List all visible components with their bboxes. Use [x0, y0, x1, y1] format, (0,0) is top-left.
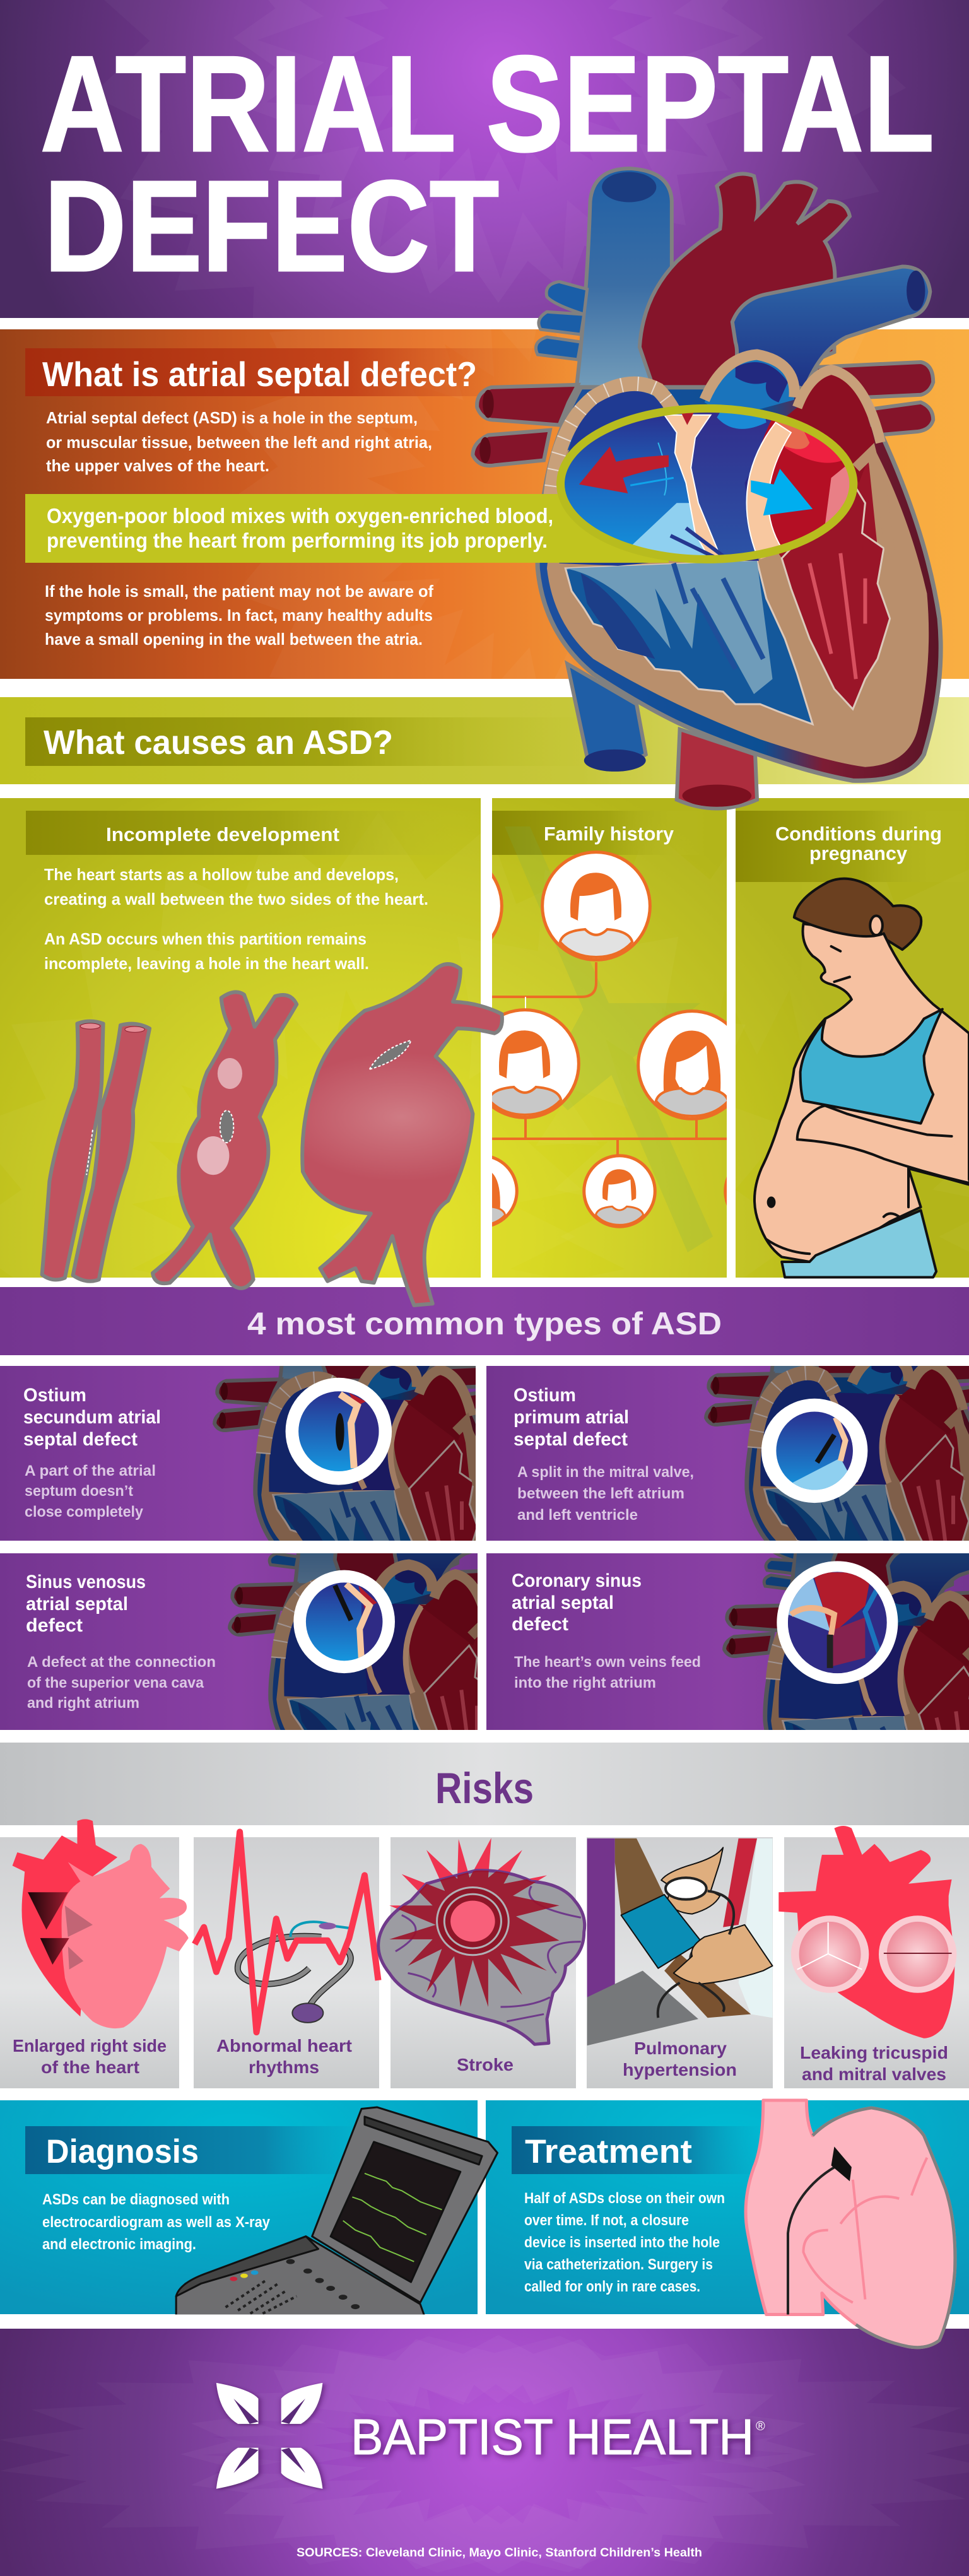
text: callout — [47, 504, 553, 552]
card text: sinus venosus: and right atrium — [27, 1695, 139, 1712]
heading: what causes: What causes an ASD? — [44, 724, 393, 762]
person: grandparent — [543, 852, 650, 960]
icon: leaking valves heart — [778, 1826, 956, 2038]
text: small hole note: symptoms or problems. In fact, many healthy adults — [45, 606, 433, 625]
heading: risks: Risks — [435, 1764, 534, 1813]
panel: incomplete development — [0, 798, 481, 1278]
card backgrounds — [0, 1366, 969, 1730]
text: callout: Oxygen-poor blood mixes with oxygen-enriched blood, — [47, 504, 553, 527]
lens: coronary sinus — [777, 1561, 898, 1684]
card text: ostium secundum: close completely — [25, 1503, 144, 1520]
heading: family history: Family history — [544, 823, 674, 845]
card text: ostium primum: septal defect — [514, 1429, 628, 1450]
person: child left — [492, 1156, 519, 1226]
text: definition: the upper valves of the heart. — [46, 456, 269, 475]
illustration: family tree — [394, 852, 796, 1226]
panel art: family faint shapes — [505, 826, 713, 1252]
card art: ostium secundum heart — [213, 1366, 476, 1541]
footer background — [0, 2320, 969, 2576]
card art: sinus venosus heart — [230, 1447, 524, 1850]
header background — [0, 0, 969, 318]
card text: ostium primum: Ostium — [514, 1385, 576, 1406]
label: enlarged right side: of the heart — [41, 2057, 139, 2077]
card text: ostium secundum: secundum atrial — [23, 1407, 161, 1428]
detail: highlighted defect ellipse — [560, 408, 862, 563]
arrow: oxygen-rich flow left — [579, 447, 669, 493]
person: child right — [724, 1177, 727, 1206]
card text: ostium secundum: septal defect — [23, 1429, 138, 1450]
heading bar: treatment — [512, 2126, 764, 2174]
person: top left — [492, 873, 503, 939]
label: abnormal rhythms — [216, 2036, 352, 2077]
illustration: main heart — [473, 168, 941, 808]
card text: sinus venosus: Sinus venosus — [26, 1572, 146, 1592]
card text: ostium secundum — [23, 1385, 161, 1520]
text: small hole note — [45, 582, 433, 649]
label: abnormal rhythms: Abnormal heart — [216, 2036, 352, 2056]
card text: coronary sinus: into the right atrium — [514, 1674, 656, 1691]
person: father — [492, 1008, 580, 1119]
title — [40, 27, 934, 298]
icon: blood pressure cuff — [587, 1838, 772, 2045]
heading bar: diagnosis — [25, 2126, 366, 2174]
text: development: incomplete, leaving a hole in the heart wall. — [44, 954, 369, 973]
icon: ECG and stethoscope — [195, 1832, 379, 2032]
text: development: creating a wall between the two sides of the heart. — [44, 890, 428, 909]
lens: ostium secundum — [286, 1378, 392, 1485]
label: leaking valves: and mitral valves — [802, 2064, 946, 2084]
card text: sinus venosus: of the superior vena cava — [27, 1674, 204, 1691]
heading: diagnosis: Diagnosis — [46, 2133, 199, 2170]
ellipse outline — [560, 408, 854, 559]
icon: enlarged heart — [13, 1819, 189, 2028]
icons: risks illustrations — [13, 1819, 956, 2045]
label: pulmonary hypertension: Pulmonary — [634, 2038, 727, 2058]
card text: sinus venosus — [26, 1572, 216, 1712]
text: treatment: via catheterization. Surgery is — [524, 2256, 713, 2273]
heading: treatment: Treatment — [525, 2133, 692, 2170]
card text: ostium primum — [514, 1385, 694, 1524]
stage 1: two tubes — [42, 1021, 150, 1281]
stage 3: formed heart — [302, 964, 502, 1305]
text: callout: preventing the heart from performing its job properly. — [47, 529, 548, 552]
logo: Baptist Health wordmark: BAPTIST HEALTH — [351, 2409, 754, 2465]
text: definition: Atrial septal defect (ASD) is a hole in the septum, — [46, 408, 418, 427]
heading bar: what is ASD — [25, 348, 568, 396]
card text: ostium secundum: Ostium — [23, 1385, 86, 1406]
illustration: pregnant woman — [755, 879, 969, 1277]
label: enlarged right side — [13, 2036, 167, 2077]
panel: family history — [492, 798, 727, 1278]
panel: what causes band — [0, 697, 969, 784]
illustration: heart with closure device — [746, 2100, 955, 2348]
text: development — [44, 865, 428, 973]
text: small hole note: have a small opening in the wall between the atria. — [45, 630, 423, 649]
card text: sinus venosus: defect — [26, 1615, 83, 1636]
card text: coronary sinus: The heart’s own veins feed — [514, 1654, 701, 1671]
text: diagnosis: electrocardiogram as well as X-ray — [42, 2214, 271, 2231]
card text: ostium primum: primum atrial — [514, 1407, 629, 1428]
text: sources: SOURCES: Cleveland Clinic, Mayo Clinic, Stanford Children’s Health — [297, 2546, 702, 2560]
text: small hole note: If the hole is small, the patient may not be aware of — [45, 582, 433, 601]
card text: coronary sinus: atrial septal — [512, 1592, 614, 1613]
heading: conditions during pregnancy: pregnancy — [809, 842, 908, 864]
illustration: ECG machine — [176, 2107, 498, 2322]
logo: Baptist Health mark — [216, 2383, 322, 2489]
text: treatment: device is inserted into the hole — [524, 2234, 720, 2251]
heading: what is ASD: What is atrial septal defect? — [42, 355, 477, 394]
text: treatment: over time. If not, a closure — [524, 2212, 689, 2229]
person: child — [584, 1156, 655, 1226]
lens: sinus venosus — [293, 1570, 395, 1673]
panel texture — [457, 914, 746, 1240]
lens: ostium primum — [761, 1399, 867, 1503]
card text: ostium primum: between the left atrium — [517, 1485, 684, 1502]
card art: coronary sinus heart — [724, 1469, 969, 1872]
card text: sinus venosus: A defect at the connection — [27, 1654, 216, 1671]
text: diagnosis — [42, 2191, 271, 2253]
card text: coronary sinus: Coronary sinus — [512, 1570, 642, 1591]
illustration: heart development stages — [42, 964, 502, 1305]
label: pulmonary hypertension: hypertension — [623, 2060, 737, 2079]
text: treatment: Half of ASDs close on their own — [524, 2190, 725, 2207]
panel: conditions during pregnancy — [736, 798, 969, 1278]
card text: ostium secundum: septum doesn’t — [25, 1483, 133, 1500]
heading bars: cause panels — [26, 811, 969, 882]
card text: sinus venosus: atrial septal — [26, 1594, 128, 1614]
person: mother — [637, 1009, 727, 1120]
arrow: oxygen-poor flow right — [751, 469, 813, 515]
heading bar: what causes — [25, 717, 593, 766]
text: definition: or muscular tissue, between the left and right atria, — [46, 433, 432, 452]
heading: conditions during pregnancy: Conditions during — [775, 823, 942, 845]
card art: ostium primum heart — [704, 1366, 969, 1541]
text: diagnosis: and electronic imaging. — [42, 2236, 196, 2253]
card text: ostium primum: and left ventricle — [517, 1507, 638, 1524]
card text: coronary sinus: defect — [512, 1614, 568, 1635]
card text: coronary sinus — [512, 1570, 701, 1691]
card text: ostium primum: A split in the mitral valve, — [517, 1464, 694, 1481]
label: stroke: Stroke — [457, 2055, 514, 2074]
text: definition — [46, 408, 432, 475]
panel: diagnosis — [0, 2100, 478, 2314]
icon: brain with stroke burst — [379, 1838, 585, 2044]
text: diagnosis: ASDs can be diagnosed with — [42, 2191, 230, 2208]
text: treatment: called for only in rare cases. — [524, 2278, 700, 2295]
label: leaking valves: Leaking tricuspid — [800, 2043, 948, 2062]
text: development: An ASD occurs when this partition remains — [44, 929, 367, 948]
logo: Baptist Health wordmark: ® — [756, 2420, 765, 2433]
panel: what is ASD background — [0, 329, 969, 679]
heading: conditions during pregnancy — [775, 823, 942, 864]
lenses showing each defect — [286, 1378, 898, 1684]
label: leaking valves — [800, 2043, 948, 2084]
heading: four types: 4 most common types of ASD — [247, 1306, 722, 1341]
stage 2: looped tube — [153, 992, 297, 1288]
panels: risks — [0, 1837, 969, 2088]
title: DEFECT — [44, 154, 499, 298]
label: enlarged right side: Enlarged right side — [13, 2036, 167, 2056]
heading: incomplete development: Incomplete development — [106, 823, 339, 845]
text: development: The heart starts as a hollow tube and develops, — [44, 865, 399, 884]
panel: treatment — [486, 2100, 969, 2314]
label: pulmonary hypertension — [623, 2038, 737, 2079]
section band: 4 most common types — [0, 1287, 969, 1355]
callout bar: oxygen-poor blood — [25, 494, 669, 563]
band: risks heading — [0, 1743, 969, 1825]
card text: ostium secundum: A part of the atrial — [25, 1462, 156, 1479]
text: treatment — [524, 2190, 725, 2295]
label: abnormal rhythms: rhythms — [249, 2057, 319, 2077]
